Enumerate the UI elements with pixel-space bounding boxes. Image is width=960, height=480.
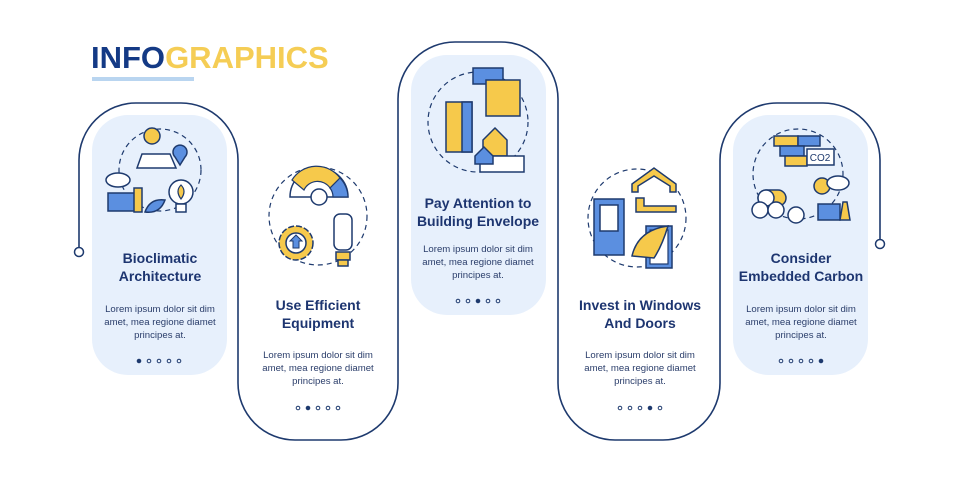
- dots: [456, 299, 500, 303]
- text block: principes at.: [134, 330, 186, 341]
- text block: Lorem ipsum dolor sit dim: [423, 244, 533, 255]
- icon: embedded carbon: CO2: [810, 153, 831, 164]
- heading: Consider: [771, 250, 832, 266]
- heading: Embedded Carbon: [739, 268, 863, 284]
- title: INFOGRAPHICS: [91, 40, 329, 75]
- text block: amet, mea regione diamet: [262, 363, 374, 374]
- text block: [584, 350, 696, 387]
- heading: Use Efficient: [276, 297, 361, 313]
- text block: principes at.: [775, 330, 827, 341]
- dots: [779, 359, 823, 363]
- icon: building envelope: [428, 68, 528, 172]
- heading: Bioclimatic: [123, 250, 198, 266]
- dots: [137, 359, 181, 363]
- panel: windows and doors: [579, 168, 701, 410]
- text block: [422, 244, 534, 281]
- text block: principes at.: [292, 376, 344, 387]
- heading: [739, 250, 863, 284]
- heading: Pay Attention to: [425, 195, 531, 211]
- heading: [579, 297, 701, 331]
- icon: embedded carbon: [752, 129, 850, 223]
- text block: Lorem ipsum dolor sit dim: [746, 304, 856, 315]
- heading: [119, 250, 201, 284]
- text block: amet, mea regione diamet: [745, 317, 857, 328]
- dots: [618, 406, 662, 410]
- text block: Lorem ipsum dolor sit dim: [585, 350, 695, 361]
- panel: bioclimatic architecture: [92, 115, 227, 375]
- heading: Building Envelope: [417, 213, 539, 229]
- panel: efficient equipment: [262, 166, 374, 410]
- heading: Equipment: [282, 315, 354, 331]
- panel: embedded carbon: [733, 115, 868, 375]
- text block: Lorem ipsum dolor sit dim: [263, 350, 373, 361]
- text block: principes at.: [452, 270, 504, 281]
- text block: [262, 350, 374, 387]
- text block: amet, mea regione diamet: [104, 317, 216, 328]
- text block: [104, 304, 216, 341]
- heading: Architecture: [119, 268, 201, 284]
- icon: equipment: [269, 166, 367, 266]
- heading: Invest in Windows: [579, 297, 701, 313]
- text block: [745, 304, 857, 341]
- text block: principes at.: [614, 376, 666, 387]
- dots: [296, 406, 340, 410]
- text block: amet, mea regione diamet: [422, 257, 534, 268]
- heading: And Doors: [604, 315, 676, 331]
- panel: building envelope: [411, 55, 546, 315]
- icon: windows and doors: [588, 168, 686, 268]
- heading: [417, 195, 539, 229]
- text block: amet, mea regione diamet: [584, 363, 696, 374]
- timeline outline: [74, 42, 884, 440]
- text block: Lorem ipsum dolor sit dim: [105, 304, 215, 315]
- icon: bioclimatic: [106, 128, 201, 212]
- heading: [276, 297, 361, 331]
